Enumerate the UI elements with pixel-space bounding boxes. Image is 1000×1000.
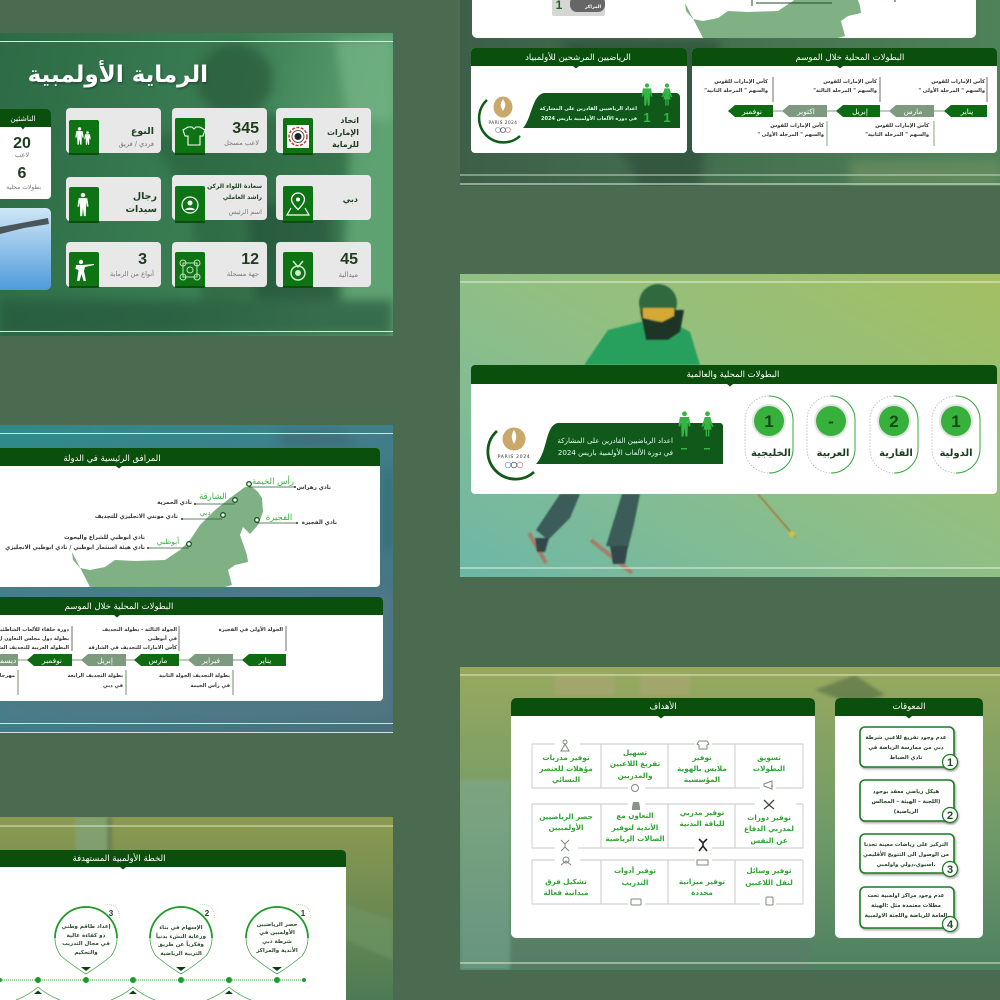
- card: president: سعادة اللواء الركن: [207, 183, 262, 190]
- card: medals: [276, 242, 371, 288]
- objective frames: [532, 744, 803, 904]
- card: registered bodies: جهة مسجلة: [227, 270, 259, 278]
- card: Dubai: دبي: [343, 195, 358, 204]
- objective text: المؤسسية: [684, 775, 720, 784]
- objective text: توفير: [691, 753, 712, 762]
- objective text: عن النفس: [750, 836, 788, 845]
- obstacle 2: [860, 780, 958, 822]
- timeline: [0, 626, 286, 695]
- timeline: والسهم " المرحلة الثانية": [704, 88, 768, 94]
- banner: Paris qualification: في دورة الألعاب الأولمبية باريس 2024: [558, 448, 673, 457]
- water photo: [0, 430, 393, 720]
- card: registered players: [172, 108, 267, 155]
- card: federation: اتحاد: [340, 116, 359, 125]
- plan goal 3: [55, 904, 119, 974]
- card: juniors: 6: [18, 165, 27, 182]
- card: president: راشد العاملي: [223, 194, 263, 201]
- obstacle 1: [860, 727, 958, 770]
- obstacle 2: (اللجنة – الهيئة – المجالس: [872, 799, 940, 805]
- photo: [460, 675, 885, 970]
- map callouts: الشارقة: [199, 492, 227, 502]
- panel: season tournaments: البطولات المحلية خلال الموسم: [796, 53, 904, 63]
- objective text: توفير دورات: [747, 813, 791, 822]
- stat: international: [932, 396, 980, 473]
- objective text: تسويق: [757, 753, 781, 762]
- stat: international: 1: [951, 412, 961, 431]
- panel: main facilities and tournaments: [0, 425, 393, 733]
- plan goal 2: ورعاية النشء بدنياً: [156, 932, 207, 940]
- timeline: في أبوظبي: [148, 635, 177, 642]
- objective text: تفريغ اللاعبين: [610, 759, 660, 768]
- objective text: توفير مدربات: [542, 753, 590, 762]
- objective text: للياقة البدنية: [679, 819, 725, 828]
- banner: Paris qualification: اعداد الرياضيين القادرين على المشاركة: [557, 436, 673, 445]
- timeline: والسهم " المرحلة الأولى ": [918, 87, 985, 94]
- map callouts: نادي مونتي الانجليزي للتجديف: [95, 514, 178, 520]
- lower plan markers: [16, 987, 251, 1000]
- card: obstacles: [835, 698, 983, 938]
- timeline: في رأس الخيمة: [190, 682, 230, 689]
- photo card: rifle: [0, 208, 51, 290]
- title: الرماية الأولمبية: [28, 59, 208, 88]
- objective text: تشكيل فرق: [545, 877, 587, 886]
- panel: Olympic candidates: [471, 48, 687, 153]
- timeline: بطولة التجديف الرابعة: [68, 673, 123, 679]
- plan goal 1: [246, 904, 310, 974]
- panel: local and international tournaments: [460, 274, 1000, 577]
- card: juniors: 20: [13, 135, 31, 152]
- objective text: توفير مدربي: [680, 808, 725, 817]
- map callouts: نادي هيئة استثمار ابوظبي / نادي ابوظبي الانجليزي: [5, 545, 145, 551]
- card: registered players: لاعب مسجل: [224, 139, 259, 147]
- panel: Olympic plan: [0, 817, 393, 1000]
- objective text: والمدربين: [618, 771, 652, 780]
- timeline: في دبي: [103, 683, 123, 689]
- obstacle 4: عدم وجود مراكز اولمبية تحت: [868, 892, 945, 899]
- Paris 2024 logo: PARIS 2024: [489, 120, 517, 125]
- Paris 2024 logo: [479, 96, 520, 142]
- card: objectives: الأهداف: [649, 701, 677, 712]
- card: type: النوع: [131, 126, 154, 137]
- card: president: [172, 175, 267, 223]
- plan goal 3: 3: [109, 909, 114, 918]
- stat: international: الدولية: [939, 448, 973, 459]
- panel: season tournaments: [0, 597, 383, 701]
- card: shooting types: [66, 242, 161, 288]
- timeline: نوفمبر: [741, 107, 762, 116]
- panel: Olympic candidates and season tournaments: [460, 0, 1000, 186]
- objective text: تسهيل: [623, 748, 647, 757]
- objective text: التعاون مع: [616, 811, 654, 820]
- Paris 2024 logo: [488, 428, 534, 479]
- objective text: محددة: [691, 888, 713, 897]
- panel: objectives and obstacles: [460, 667, 1000, 970]
- plan goal 3: والتحكيم: [74, 949, 98, 956]
- plan goal 3: في مجال التدريب: [62, 941, 110, 947]
- stat: continental: القارية: [879, 448, 913, 459]
- obstacle 2: 2: [947, 810, 953, 822]
- obstacle 1: عدم وجود تفريغ للاعبي شرطة: [865, 735, 947, 741]
- obstacle 1: 1: [947, 757, 953, 769]
- panel: facility map: المرافق الرئيسية في الدولة: [63, 454, 161, 464]
- objective text: لنقل اللاعبين: [745, 878, 793, 887]
- timeline: الجولة الثالثة - بطولة التجديف: [102, 627, 177, 633]
- objective text: ميدانية فعالة: [543, 888, 589, 897]
- objective text: النسائي: [552, 775, 580, 784]
- obstacle 2: الرياضية): [894, 809, 918, 815]
- card: men and women: [66, 177, 161, 223]
- obstacle 1: دبي من ممارسة الرياضة في: [868, 745, 944, 751]
- plan goal 3: إعداد طاقم وطني: [62, 924, 111, 930]
- stat: Arab: -: [828, 412, 834, 431]
- timeline: والسهم " المرحلة الثانية": [865, 132, 929, 138]
- athlete photo: [560, 40, 1000, 186]
- dotted timeline: [0, 977, 306, 983]
- panel: Olympic candidates: الرياضيين المرشحين للأولمبياد: [525, 52, 631, 63]
- card: shooting types: أنواع من الرماية: [110, 269, 154, 278]
- plan goal 1: الأولمبين في: [259, 928, 295, 936]
- timeline: بطولة دول مجلس التعاون ل: [0, 636, 69, 642]
- card: type: [66, 108, 161, 155]
- objective text: توفير ميزانية: [679, 877, 725, 886]
- banner: Paris qualification: [536, 411, 723, 464]
- obstacle 2: هيكل رياضي معقد بوجود: [873, 788, 939, 795]
- card: medals: 45: [340, 251, 358, 268]
- card: Dubai: [276, 175, 371, 223]
- stat: Gulf: 1: [764, 412, 774, 431]
- banner: [523, 83, 680, 128]
- timeline: يناير: [960, 107, 973, 116]
- UAE map: [72, 487, 263, 587]
- map callouts: نادي رهراس: [297, 485, 331, 491]
- card: federation: للرماية: [332, 140, 359, 149]
- card: medals: ميدالية: [339, 271, 358, 279]
- timeline: كأس الإمارات للقوس: [875, 122, 929, 129]
- panel: Olympic shooting overview: [0, 33, 393, 336]
- obstacle 1: نادي الضباط: [890, 755, 922, 761]
- skier photo: [529, 284, 795, 573]
- objective text: مؤهلات للعنصر: [538, 764, 593, 773]
- plan goal 1: الأندية والمراكز: [255, 946, 298, 954]
- map callouts: أبوظبي: [157, 536, 179, 546]
- objective text: البطولات: [753, 764, 785, 773]
- shooter photo: [0, 40, 393, 336]
- timeline: مارس: [904, 107, 922, 116]
- stat: continental: 2: [889, 412, 899, 431]
- card: shooting types: 3: [138, 251, 147, 268]
- timeline: [704, 77, 987, 146]
- card: juniors: بطولات محلية: [6, 184, 41, 191]
- objective text: توفير أدوات: [614, 866, 656, 875]
- timeline: إبريل: [852, 107, 868, 116]
- map callouts: نادي ابوظبي للشراع واليخوت: [64, 535, 145, 541]
- plan goal 2: الإسهام في بناء: [159, 925, 203, 931]
- panel: season tournaments: البطولات المحلية خلال الموسم: [65, 602, 173, 612]
- objective text: الأولمبيين: [548, 823, 584, 832]
- card: men and women: سيدات: [125, 204, 157, 215]
- building photo: [75, 817, 393, 960]
- stat: continental: [870, 396, 918, 473]
- map callouts: دبي: [200, 509, 210, 517]
- card: juniors: الناشئين: [10, 114, 36, 123]
- map callouts: الفجيرة: [266, 513, 292, 523]
- card: obstacles: المعوقات: [892, 702, 926, 712]
- banner: 1: [643, 110, 651, 125]
- map facilities panel fragment: المراكز: [584, 4, 601, 10]
- objective text: الصالات الرياضية: [605, 834, 665, 843]
- plan goal 3: ذو كفاءة عالية: [67, 932, 106, 939]
- card: tournaments: البطولات المحلية والعالمية: [687, 370, 779, 380]
- timeline: كأس الإمارات للقوس: [931, 78, 985, 85]
- timeline: نوفمبر: [41, 656, 62, 665]
- objective text: التدريب: [622, 878, 648, 887]
- timeline: والسهم " المرحلة الأولى ": [757, 131, 824, 138]
- timeline: مارس: [149, 656, 167, 665]
- obstacle 4: 4: [947, 919, 954, 931]
- card: juniors: [0, 109, 51, 199]
- plan goal 2: [150, 904, 214, 974]
- banner: في دورة الألعاب الأولمبية باريس 2024: [541, 115, 637, 122]
- objective text: توفير وسائل: [746, 866, 792, 875]
- plan goal 2: التربية الرياضية: [160, 951, 202, 957]
- card: plan: [0, 850, 346, 1000]
- card: president: اسم الرئيس: [228, 208, 262, 216]
- obstacle 4: مظلات معتمدة مثل :الهيئة: [871, 903, 941, 909]
- stat: Gulf: الخليجية: [751, 448, 791, 459]
- timeline: إبريل: [97, 656, 113, 665]
- timeline: كأس الامارات للتجديف في الشارقة: [88, 644, 177, 651]
- plan goal 2: 2: [205, 909, 210, 918]
- card: plan: الخطة الأولمبية المستهدفة: [73, 853, 165, 864]
- map callouts: رأس الخيمة: [252, 475, 294, 487]
- map callouts: نادي الفجيرة: [302, 520, 337, 526]
- card: registered bodies: [172, 242, 267, 288]
- panel: season tournaments: [692, 48, 997, 153]
- objective text: [538, 748, 794, 897]
- obstacle 4: العامة للرياضة واللجنة الاولمبية: [865, 913, 947, 919]
- card: registered players: 345: [232, 120, 259, 137]
- obstacle 3: 3: [947, 864, 953, 876]
- timeline: بطولة التجديف الجولة الثانية: [159, 673, 230, 679]
- card: tournaments: [471, 365, 997, 494]
- card: type: فردي / فريق: [119, 140, 154, 148]
- obstacle 3: [860, 834, 958, 876]
- card: federation: الإمارات: [327, 128, 359, 137]
- timeline: والسهم " المرحلة الثالثة": [813, 88, 877, 94]
- objective text: ملابس بالهوية: [677, 764, 727, 773]
- timeline: كأس الإمارات للقوس: [823, 78, 877, 85]
- objective text: حصر الرياضيين: [539, 812, 593, 821]
- timeline: اكتوبر: [796, 107, 815, 116]
- banner: اعداد الرياضيين القادرين على المشاركة: [540, 106, 637, 112]
- card: registered bodies: 12: [241, 251, 259, 268]
- obstacle 3: من الوصول الى التتويج الأقليمي: [863, 850, 949, 858]
- plan goal 2: وفكرياً عن طريق: [158, 940, 205, 948]
- obstacle 3: .اسيوي،دولي واولمبي: [876, 862, 936, 868]
- map callouts: نادي الحمرية: [157, 500, 192, 506]
- obstacle 4: [860, 887, 958, 932]
- stat: Arab: [807, 396, 855, 473]
- timeline: كأس الإمارات للقوس: [714, 78, 768, 85]
- timeline: الجولة الأولى في الفجيرة: [219, 626, 283, 633]
- timeline: يناير: [258, 656, 271, 665]
- map facilities panel fragment: [472, 0, 976, 38]
- obstacle 3: التركيز على رياضات معينة تحدنا: [864, 841, 948, 848]
- panel: facility map: [0, 448, 380, 587]
- banner: 1: [663, 110, 671, 125]
- stat: Gulf: [745, 396, 793, 473]
- card: objectives: [511, 698, 815, 938]
- card: federation: [276, 108, 371, 155]
- objective icons: [561, 740, 774, 905]
- stat: Arab: العربية: [817, 448, 849, 459]
- timeline: فبراير: [201, 656, 220, 665]
- plan goal 1: حصر الرياضيين: [257, 922, 298, 928]
- card: juniors: لاعب: [15, 151, 29, 159]
- timeline: كأس الإمارات للقوس: [770, 122, 824, 129]
- card: men and women: رجال: [133, 191, 157, 202]
- objective text: الأندية لتوفير: [611, 823, 658, 832]
- map callouts: [5, 475, 337, 551]
- objective text: لمدربي الدفاع: [744, 824, 794, 833]
- Paris 2024 logo: PARIS 2024: [498, 454, 530, 460]
- plan goal 1: 1: [301, 909, 306, 918]
- plan goal 1: شرطة دبي: [262, 939, 292, 945]
